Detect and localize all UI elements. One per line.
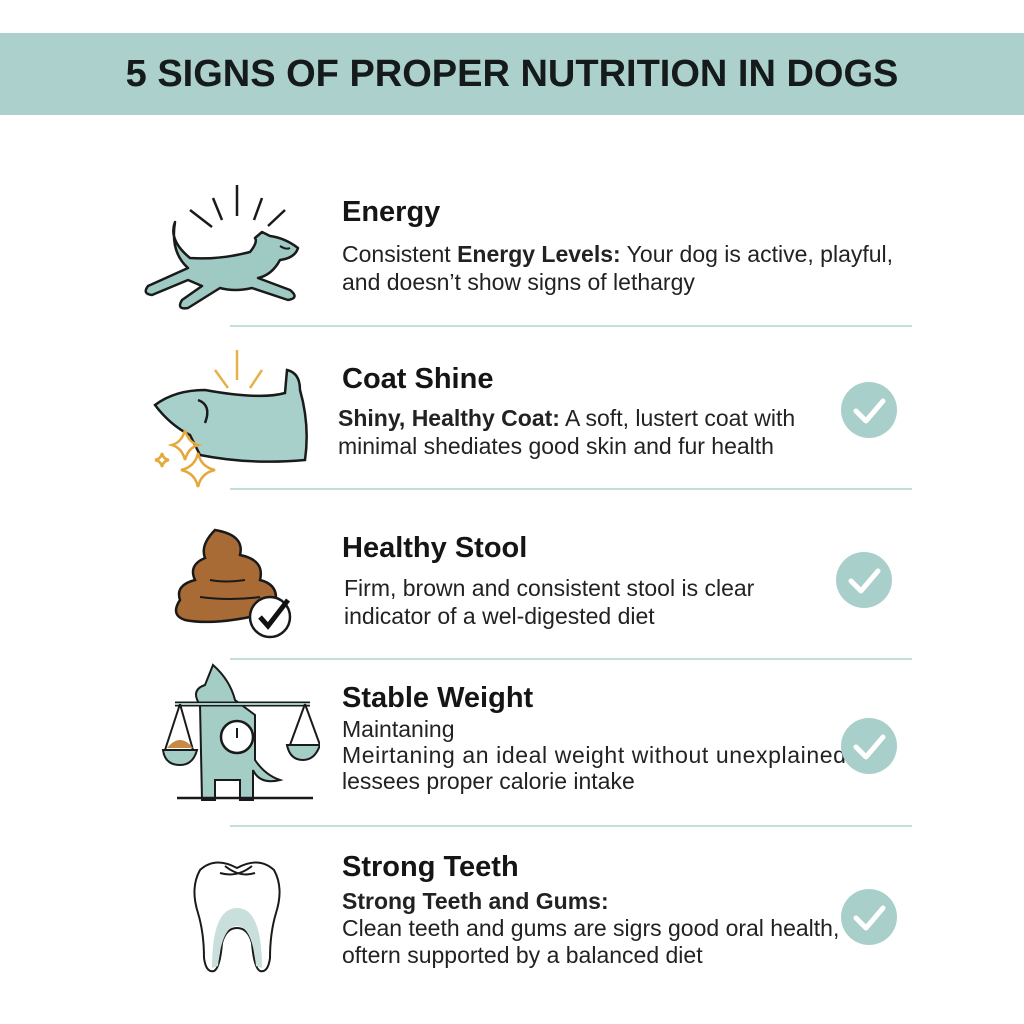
text: stool [344, 575, 754, 629]
check: stool [836, 552, 892, 608]
check: coat [841, 382, 897, 438]
text: Stable Weight [342, 682, 533, 714]
text: energy: Consistent Energy Levels: Your dog is active, playful, [342, 241, 893, 267]
text: energy: and doesn’t show signs of lethargy [342, 269, 695, 295]
title banner [0, 33, 1024, 115]
icon: stool [174, 528, 292, 638]
text: teeth: oftern supported by a balanced diet [342, 942, 703, 968]
text: weight: Maintaning [342, 716, 455, 742]
text: teeth [342, 888, 839, 968]
text: weight: Meirtaning an ideal weight without unexplained [342, 742, 847, 768]
text: teeth: Clean teeth and gums are sigrs good oral health, [342, 915, 839, 941]
text: energy [342, 241, 893, 295]
icon: running dog [144, 185, 300, 310]
text: weight: lessees proper calorie intake [342, 768, 635, 794]
check: teeth [841, 889, 897, 945]
text: weight [342, 716, 847, 794]
icon: weight scale dog [162, 663, 320, 801]
text: Coat Shine [342, 363, 493, 395]
text: coat shine [338, 405, 795, 459]
text: stool: indicator of a wel-digested diet [344, 603, 655, 629]
title: 5 SIGNS OF PROPER NUTRITION IN DOGS [126, 52, 898, 94]
text: stool: Firm, brown and consistent stool is clear [344, 575, 754, 601]
text: coat shine: minimal shediates good skin and fur health [338, 433, 774, 459]
text: teeth: Strong Teeth and Gums: [342, 888, 609, 914]
icon: tooth [193, 862, 281, 972]
text: Energy [342, 196, 440, 228]
text: Strong Teeth [342, 851, 519, 883]
text: coat shine: Shiny, Healthy Coat: A soft, lustert coat with [338, 405, 795, 431]
check: weight [841, 718, 897, 774]
text: Healthy Stool [342, 532, 527, 564]
icon: coat shine dog [153, 350, 308, 488]
